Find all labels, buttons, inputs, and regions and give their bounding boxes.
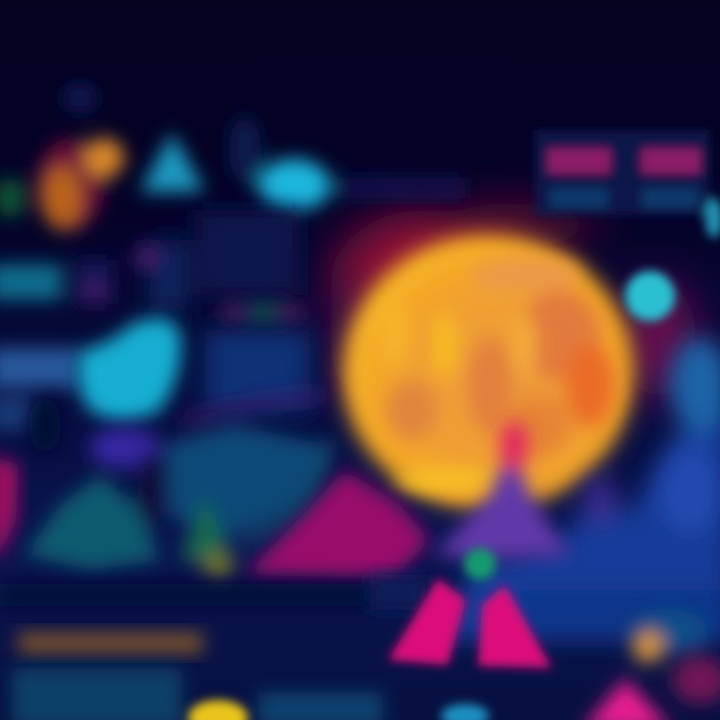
- left magenta strip: [0, 455, 18, 555]
- icon: cyan circle by moon: [625, 271, 675, 321]
- panel: lower left teal blocks: [12, 668, 383, 720]
- moon craters: [383, 257, 614, 492]
- panel: left bands: [0, 244, 304, 430]
- magenta mountain: [245, 470, 430, 578]
- icon: small cyan dot: [441, 704, 489, 720]
- panel: central dark blue column: [150, 210, 310, 410]
- left teal hills: [25, 395, 330, 579]
- icon: large cyan blob: [77, 318, 181, 420]
- panel: upper right blocks: [535, 130, 720, 238]
- purple peak: [435, 421, 570, 560]
- moon glow: [342, 234, 634, 510]
- icon: yellow semicircle: [188, 700, 248, 720]
- moon halo: [330, 203, 696, 400]
- right blue hills: [440, 337, 720, 640]
- lower dark band: [0, 575, 425, 610]
- moon: [342, 234, 634, 510]
- icon: lower right orange dot and pink peak: [582, 610, 720, 720]
- heading: lower left orange text bar: [18, 632, 203, 654]
- icon: top left orange bubbles: [0, 82, 124, 231]
- icon: cyan cloud shapes: [140, 116, 465, 211]
- moon disc: [350, 242, 626, 502]
- icon: green dot and magenta twin peaks: [388, 548, 552, 668]
